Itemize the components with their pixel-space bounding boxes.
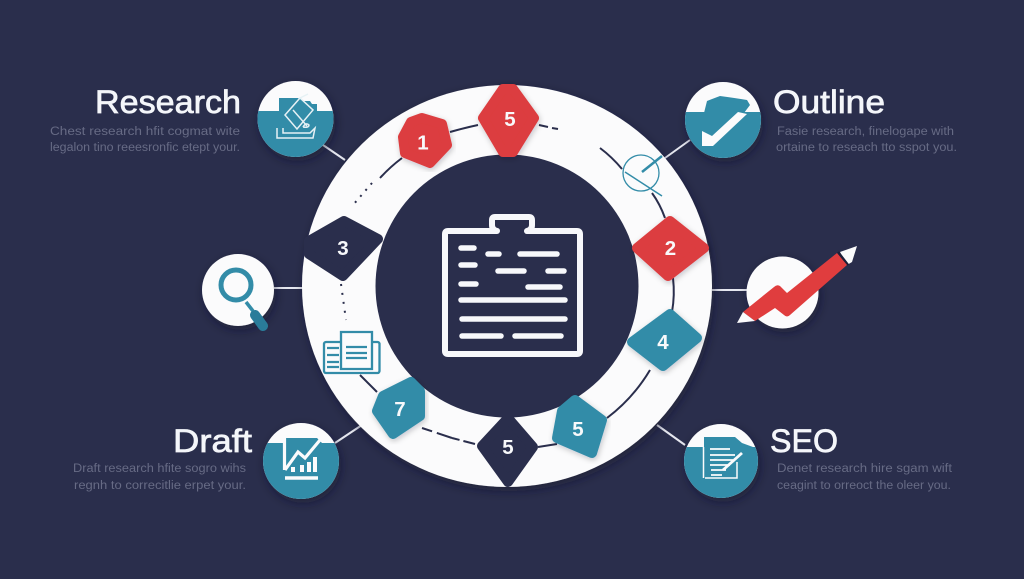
panel: draft <box>73 423 339 501</box>
icon: pencil badge <box>737 246 857 328</box>
panel: research <box>50 81 334 157</box>
node 1: 1 <box>417 132 429 154</box>
small documents icon on ring <box>324 332 380 373</box>
node 5 navy: 5 <box>502 436 514 459</box>
node 2 <box>637 221 704 276</box>
description: research: legalon tino reeesronfic etept your. <box>50 142 240 154</box>
icon: draft badge <box>263 423 339 501</box>
node 1 <box>403 118 447 163</box>
node 4 <box>632 314 697 366</box>
node 5 navy <box>482 418 533 482</box>
node 7 <box>377 382 420 434</box>
description: research: Chest research hfit cogmat wite <box>50 126 240 138</box>
node 3 <box>309 221 378 276</box>
heading: outline: Outline <box>773 84 885 120</box>
central ring <box>302 85 712 487</box>
node 5 teal <box>557 400 602 453</box>
ring track <box>341 125 674 447</box>
node 5 top <box>483 89 534 152</box>
connector lines <box>274 140 748 445</box>
heading: research: Research <box>95 84 241 120</box>
heading: seo: SEO <box>770 423 838 459</box>
description: outline: ortaine to reseach tto sspot you. <box>776 142 957 154</box>
description: draft <box>73 463 246 492</box>
description: draft: regnh to correcitlie erpet your. <box>74 480 246 492</box>
icon: research badge <box>257 81 334 157</box>
description: draft: Draft research hfite sogro wihs <box>73 463 246 475</box>
panel: seo <box>684 423 953 501</box>
node 2: 2 <box>665 237 676 260</box>
node 5 top: 5 <box>504 108 516 131</box>
heading: draft: Draft <box>173 423 252 459</box>
node 5 teal: 5 <box>572 418 584 441</box>
icon: magnifier badge <box>202 254 274 326</box>
description: seo: ceagint to orreoct the oleer you. <box>777 480 951 492</box>
central clipboard icon <box>445 217 580 354</box>
panel: outline <box>685 82 957 158</box>
description: outline <box>776 126 957 154</box>
node 3: 3 <box>337 237 349 260</box>
icon: outline badge <box>685 82 761 158</box>
description: seo <box>777 463 953 492</box>
icon: seo badge <box>684 424 758 501</box>
description: outline: Fasie research, finelogape with <box>777 126 954 138</box>
node 7: 7 <box>394 398 406 421</box>
description: research <box>50 126 240 154</box>
node 4: 4 <box>657 331 669 354</box>
description: seo: Denet research hire sgam wift <box>777 463 953 475</box>
small target icon on ring <box>623 155 662 196</box>
